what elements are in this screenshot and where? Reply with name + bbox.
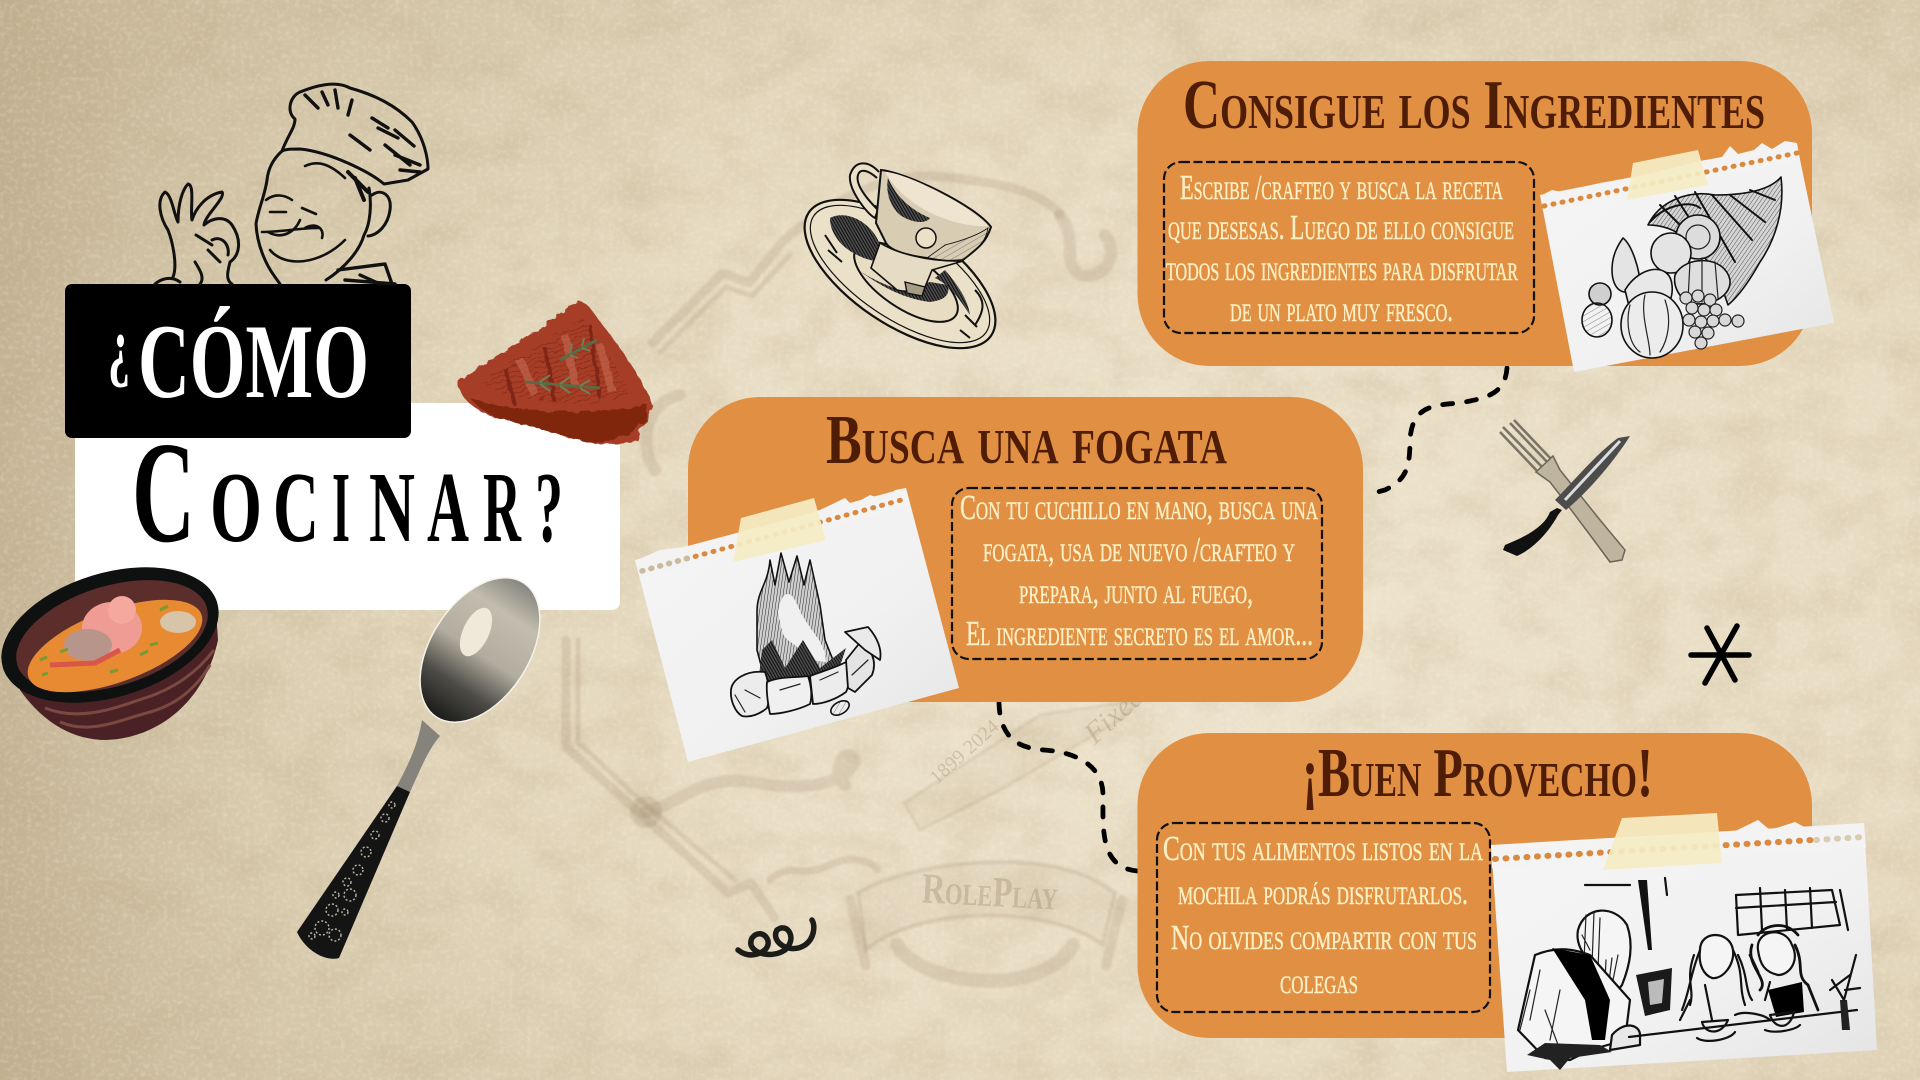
watermark text: 1899 2024 [926,715,1004,789]
text box: step 3: mochila podrás disfrutarlos. [1178,873,1468,912]
title line: como [108,301,369,420]
text box: step 2: El ingrediente secreto es el amor... [966,614,1313,653]
icon: fork and knife [1500,420,1630,562]
text box: step 3: Con tus alimentos listos en la [1163,829,1483,868]
title line: cocinar: I [332,451,350,563]
icon: squiggle doodle [738,920,814,955]
title line: cocinar: A [427,451,469,563]
icon: asterisk doodle [1691,626,1749,683]
title line: cocinar: O [210,451,262,563]
panel: buen provecho [1138,733,1877,1072]
watermark text: RolePlay [921,865,1059,920]
note card: campfire [635,488,959,762]
note card: family at table [1491,813,1877,1072]
text box: step 2 [952,488,1322,659]
title line: como: CÓMO [138,303,369,420]
connector: ingredients to campfire [1366,368,1507,495]
icon: soup bowl [0,543,235,740]
note card: cornucopia [1540,141,1834,372]
tape [1627,150,1708,200]
icon: chef [155,84,428,284]
black banner [65,284,411,438]
connector: campfire to enjoy [999,703,1138,871]
campfire drawing [731,553,880,718]
text box: step 1: que desesas. Luego de ello consigue [1168,208,1514,247]
text box: step 2: fogata, usa de nuevo /crafteo y [983,530,1295,569]
panel: consigue los ingredientes [1138,61,1834,372]
title line: cocinar: N [369,451,415,563]
text box: step 2: prepara, junto al fuego, [1019,572,1253,611]
text box: step 2: Con tu cuchillo en mano, busca una [960,488,1318,527]
text box: step 3: No olvides compartir con tus [1171,918,1477,957]
tape [1603,813,1722,870]
title line: cocinar: ? [535,451,563,563]
cornucopia drawing [1582,177,1782,358]
white banner [75,403,620,610]
text box: step 1: de un plato muy fresco. [1230,290,1453,329]
text box: step 3 [1157,823,1490,1012]
watermark text [921,679,1151,920]
text box: step 1 [1164,162,1534,333]
watermark: RolePlay badge [566,176,1310,981]
watermark text: Fixed [1077,679,1151,751]
title line: cocinar: C [273,451,319,563]
title line: cocinar: R [483,451,522,563]
title line: como: ¿ [108,301,130,388]
heading: buen provecho: ¡Buen Provecho! [1302,735,1653,812]
title: como cocinar [65,284,620,610]
text box: step 1: Escribe /crafteo y busca la receta [1180,168,1503,207]
icon: teacup [781,163,1019,377]
heading: busca una fogata: Busca una fogata [826,402,1227,479]
panel: busca una fogata [635,397,1363,762]
title line: cocinar [132,413,563,573]
icon: steak [457,301,651,444]
family at table drawing [1518,878,1860,1070]
title line: cocinar: C [132,413,195,573]
text box: step 3: colegas [1280,962,1358,1001]
tape [733,498,826,562]
icon: rosemary on steak [525,338,600,394]
icon: spoon [297,556,565,959]
text box: step 1: todos los ingredientes para disfrutar [1166,249,1518,288]
